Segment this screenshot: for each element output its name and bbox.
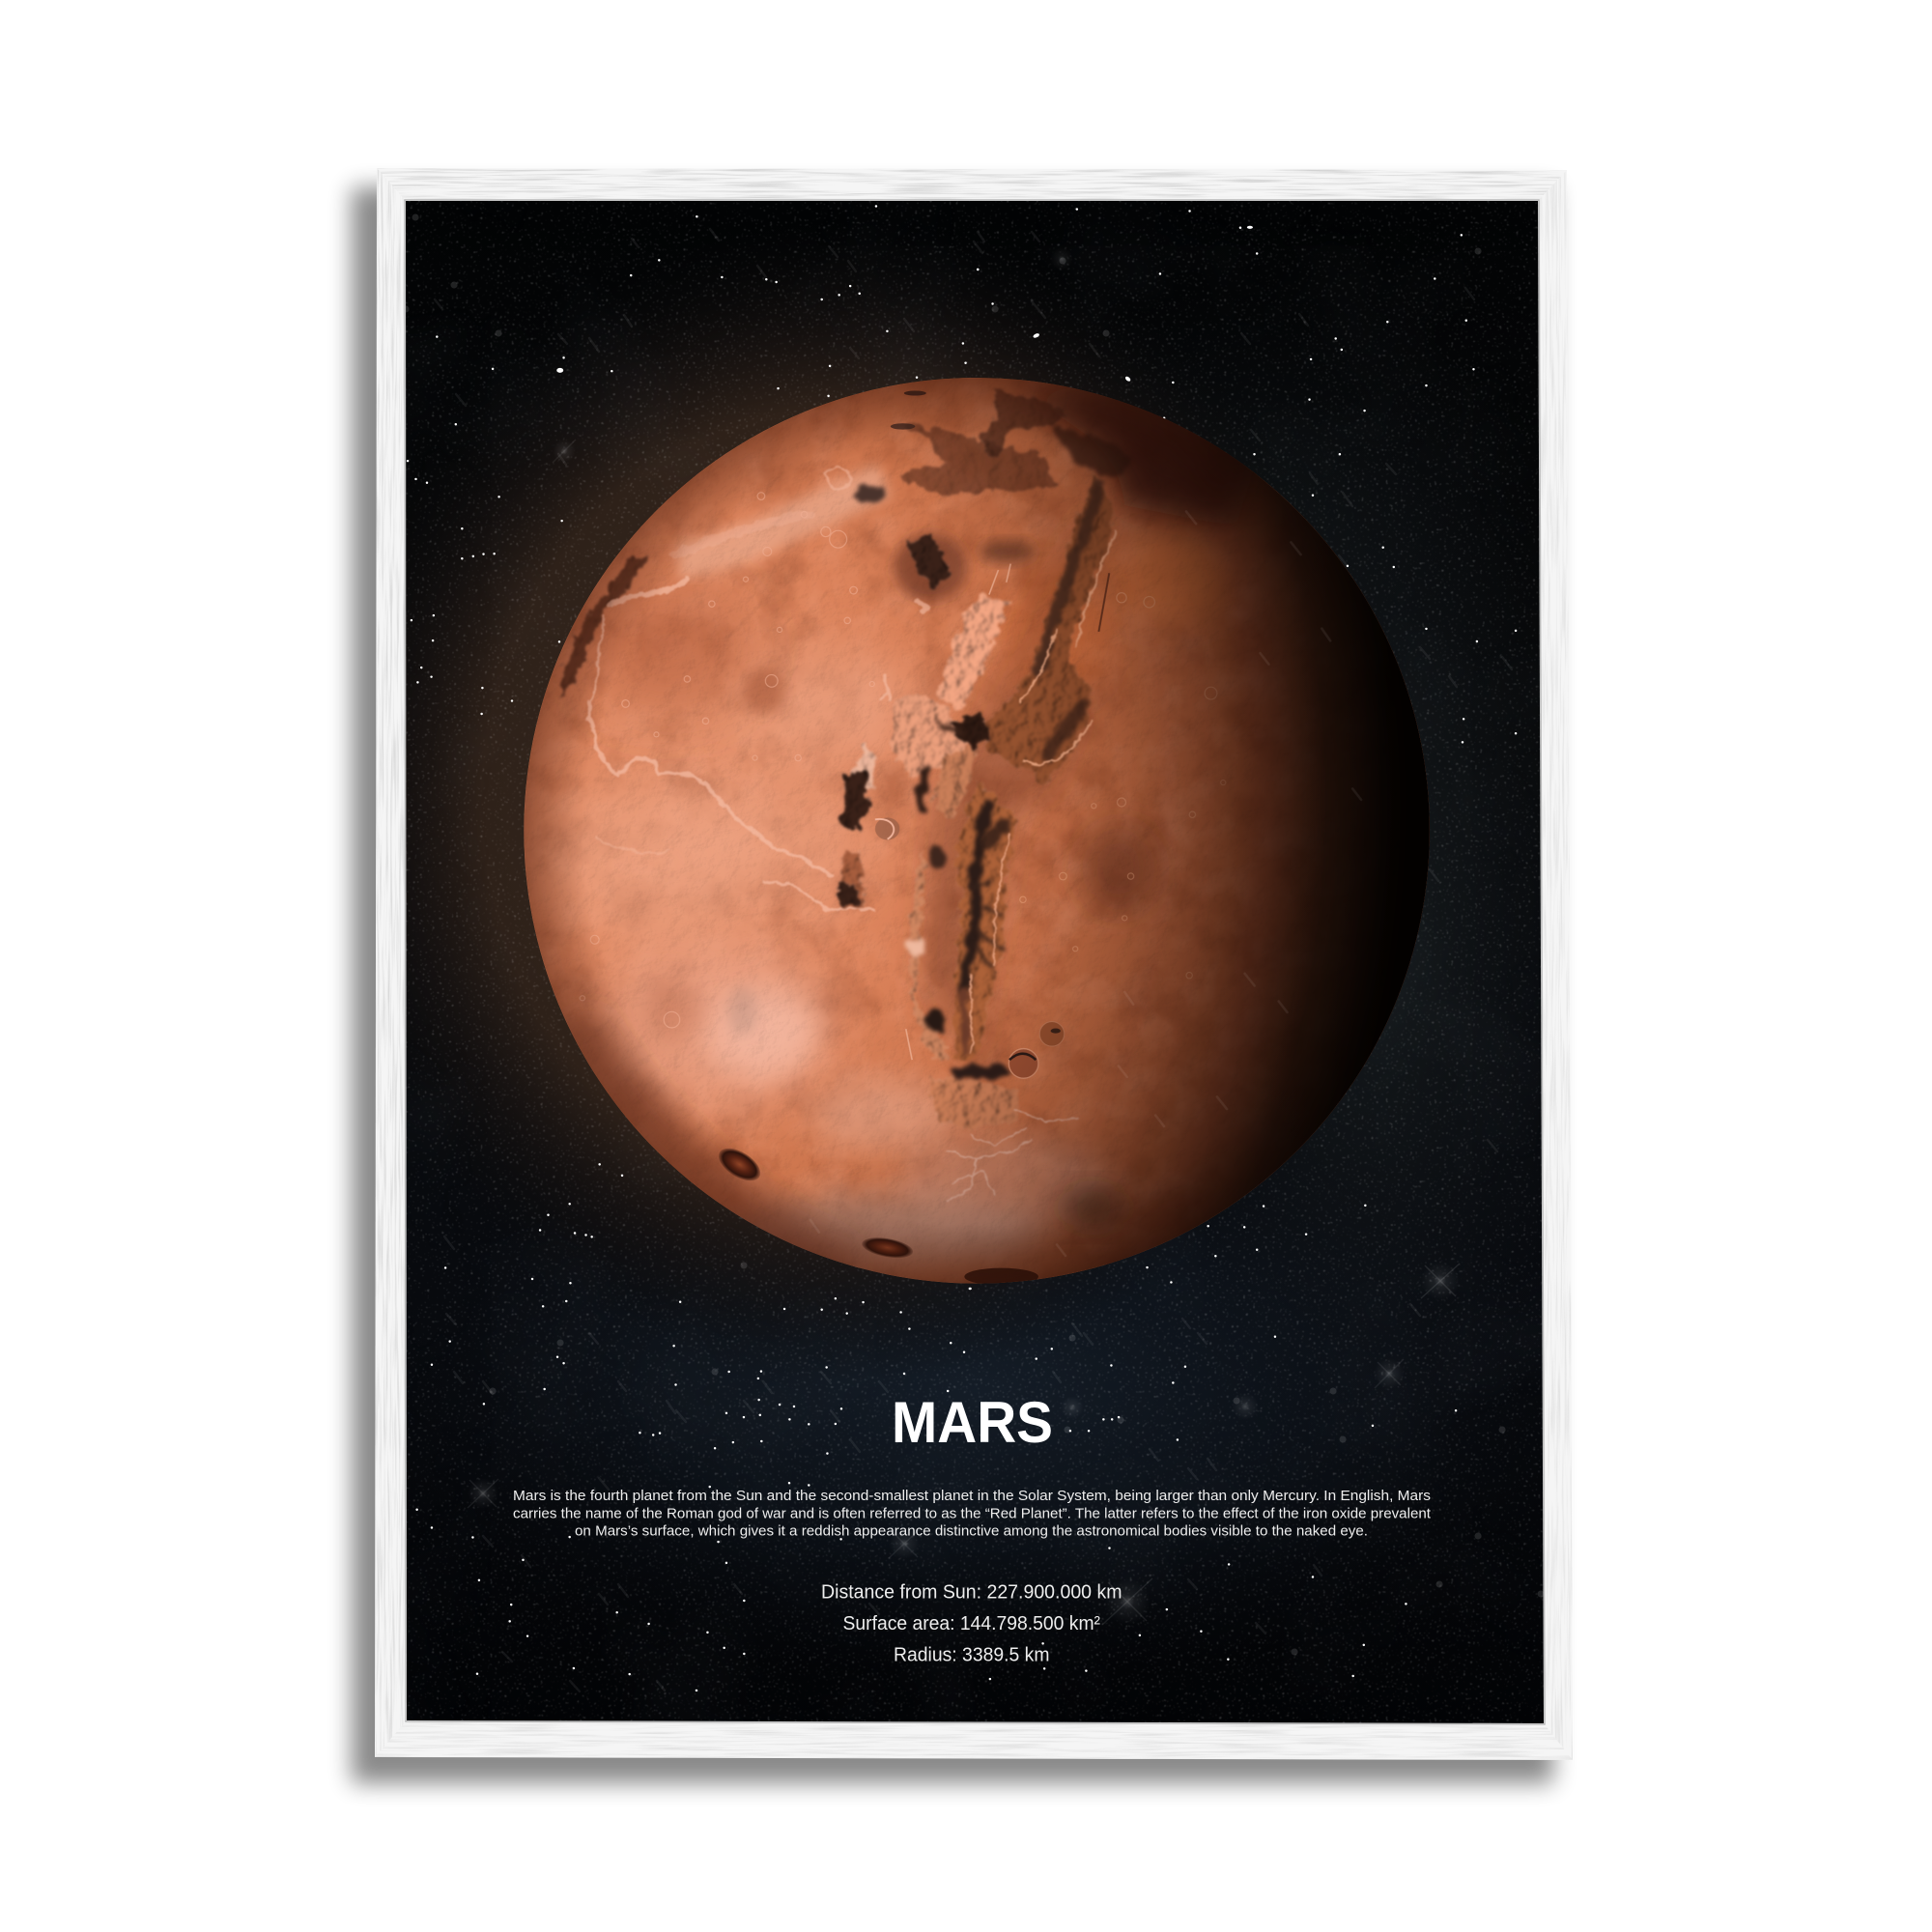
- dark junction: [952, 712, 989, 752]
- upper west dark strip: [921, 770, 927, 810]
- central chasm: [838, 743, 899, 906]
- poster artwork: [406, 201, 1544, 1723]
- frame drop shadow: [352, 187, 1553, 1783]
- terminator shading: [521, 376, 1433, 1288]
- description paragraph: carries the name of the Roman god of war and is often referred to as the “Red Planet”. The latter refers to the effect of the iron oxide prevalent: [513, 1506, 1431, 1521]
- description paragraph: Mars is the fourth planet from the Sun and the second-smallest planet in the Solar System, being larger than only Mercury. In English, Mars: [513, 1489, 1431, 1504]
- Valles Marineris canyon system: [892, 474, 1116, 1202]
- bright stars: upper right: [978, 210, 1516, 742]
- northern dark regions: [561, 390, 1131, 699]
- southern chaos terrain: [926, 1078, 1018, 1129]
- description paragraph: [513, 1489, 1431, 1540]
- large star: [556, 368, 563, 373]
- bright stars: lower left: [417, 1164, 971, 1690]
- planet disc backing: [524, 378, 1430, 1284]
- bright collapsed blob: [892, 696, 968, 777]
- dark oval: [855, 483, 885, 503]
- planet facts: Radius: 3389.5 km: [894, 1643, 1049, 1665]
- bright stars: lower right: [970, 1206, 1456, 1679]
- star flares: [468, 247, 1460, 1625]
- fractured terrain: [946, 1109, 1078, 1202]
- soft out-of-focus stars: [406, 217, 1541, 1652]
- crater: [1039, 1022, 1065, 1046]
- bright stars: upper left: [408, 207, 978, 714]
- western branch: [909, 850, 952, 1060]
- planet Mars: [521, 376, 1433, 1288]
- small craters: [580, 493, 874, 1028]
- eastern canyon spurs: [971, 881, 1002, 967]
- title: MARS: [892, 1390, 1053, 1455]
- pale rims and light ridges: [588, 468, 927, 909]
- western dark region: [561, 554, 650, 699]
- lit surface: albedo, plains and fine relief: [521, 376, 1433, 1288]
- faint diagonal streaks: [435, 229, 1512, 1691]
- space background: [406, 201, 1544, 1723]
- ring crater: [1009, 1049, 1038, 1078]
- planet surface streaks: [810, 511, 1361, 1256]
- dark blob: [894, 533, 968, 601]
- volcanoes along the south limb: [713, 1142, 1038, 1286]
- limb darkening: [524, 378, 1430, 1284]
- planet facts: [821, 1580, 1122, 1665]
- upper canyon: [982, 474, 1116, 782]
- description paragraph: on Mars’s surface, which gives it a reddish appearance distinctive among the astronomical bodies visible to the naked eye.: [575, 1524, 1368, 1540]
- outlying fissures: [906, 564, 1010, 1060]
- white wooden frame: [373, 166, 1575, 1762]
- bright northern chasm block: [937, 593, 1009, 710]
- bright plateau next to junction: [933, 746, 977, 819]
- planet facts: Distance from Sun: 227.900.000 km: [821, 1580, 1122, 1603]
- canyon shadow halo: [922, 487, 1094, 1060]
- southern canyon: [955, 782, 1015, 1060]
- planet facts: Surface area: 144.798.500 km²: [842, 1612, 1100, 1634]
